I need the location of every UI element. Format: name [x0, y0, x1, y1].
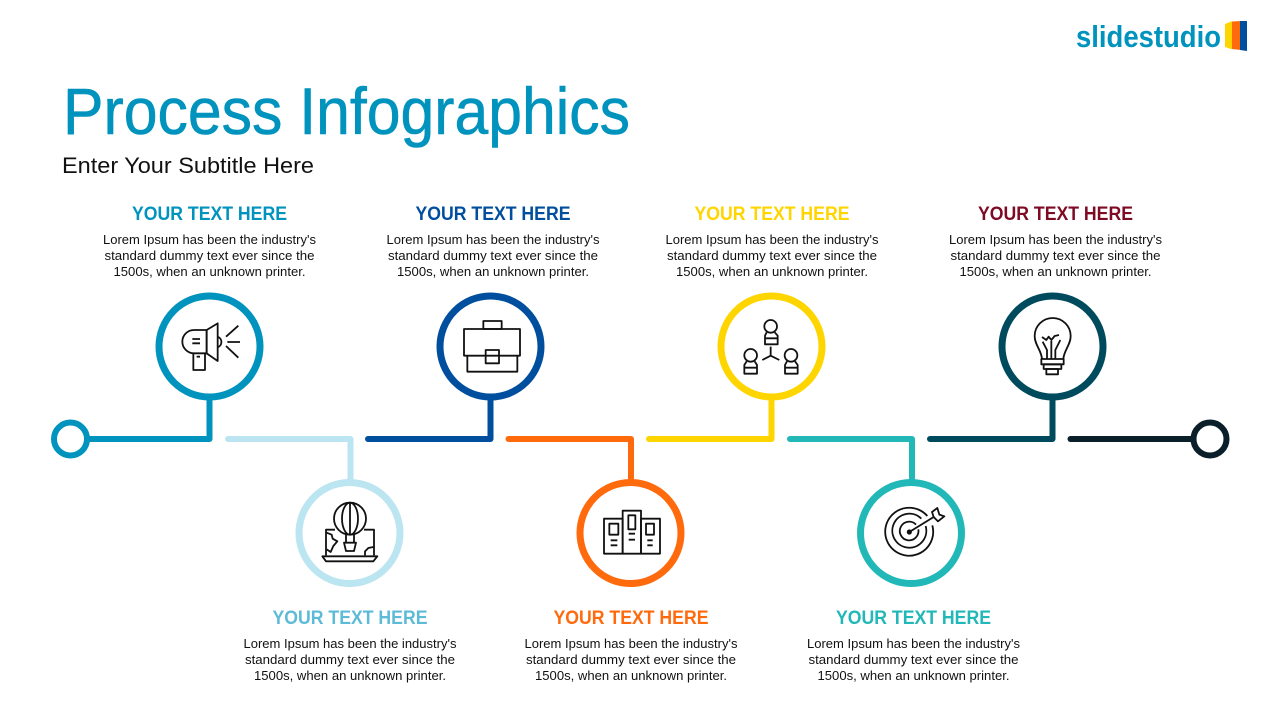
- step 3 text: [386, 233, 600, 279]
- step 7: [949, 204, 1162, 397]
- step 2 ring: [299, 482, 400, 584]
- step 4 heading: YOUR TEXT HERE: [554, 608, 708, 629]
- step 5 ring: [721, 296, 822, 397]
- step 4 text: 1500s, when an unknown printer.: [535, 669, 727, 683]
- step 4 ring: [580, 482, 681, 584]
- step 1 heading: YOUR TEXT HERE: [132, 204, 287, 225]
- step 6 text: standard dummy text ever since the: [808, 653, 1018, 667]
- step 5 text: 1500s, when an unknown printer.: [676, 265, 868, 279]
- icon: balloon and laptop: [322, 503, 377, 561]
- step 6 heading: YOUR TEXT HERE: [836, 608, 991, 629]
- connector: segment 7: [930, 398, 1052, 439]
- connector: segment 1: [88, 398, 210, 439]
- end node: [1194, 422, 1226, 456]
- step 3: [386, 204, 600, 397]
- step 6 text: Lorem Ipsum has been the industry's: [807, 637, 1020, 651]
- step 5: [666, 204, 878, 397]
- connector: segment 3: [368, 398, 490, 439]
- step 5 text: [666, 233, 878, 279]
- step 4 text: [524, 637, 738, 683]
- step 3 text: standard dummy text ever since the: [388, 249, 598, 263]
- connector: segment 2: [228, 439, 350, 482]
- title: Process Infographics: [63, 74, 630, 148]
- step 4 text: Lorem Ipsum has been the industry's: [524, 637, 738, 651]
- step 1 text: [103, 233, 316, 279]
- step 5 text: Lorem Ipsum has been the industry's: [666, 233, 878, 247]
- step 4 text: standard dummy text ever since the: [526, 653, 736, 667]
- step 7 text: [949, 233, 1162, 279]
- icon: light bulb: [1035, 318, 1071, 374]
- icon: binders: [604, 511, 660, 554]
- step 7 text: standard dummy text ever since the: [950, 249, 1160, 263]
- step 7 ring: [1002, 296, 1103, 397]
- step 6 text: 1500s, when an unknown printer.: [818, 669, 1010, 683]
- logo: slidestudio: slidestudio: [1076, 19, 1221, 54]
- step 1: [103, 204, 316, 397]
- step 1 text: Lorem Ipsum has been the industry's: [103, 233, 316, 247]
- step 3 ring: [440, 296, 541, 397]
- icon: megaphone: [182, 323, 240, 370]
- connector: segment 4: [508, 439, 631, 482]
- step 6 ring: [860, 482, 962, 584]
- step 2 heading: YOUR TEXT HERE: [272, 608, 428, 629]
- connector: segment 8: [1070, 436, 1194, 442]
- subtitle: Enter Your Subtitle Here: [62, 153, 314, 178]
- step 2 text: [244, 637, 456, 683]
- connector: segment 6: [790, 439, 912, 482]
- step 7 heading: YOUR TEXT HERE: [978, 204, 1133, 225]
- step 5 text: standard dummy text ever since the: [667, 249, 877, 263]
- step 2 text: standard dummy text ever since the: [245, 653, 455, 667]
- step 1 text: 1500s, when an unknown printer.: [114, 265, 306, 279]
- step 2 text: Lorem Ipsum has been the industry's: [244, 637, 456, 651]
- step 2 text: 1500s, when an unknown printer.: [254, 669, 446, 683]
- start node: [54, 422, 87, 456]
- step 4: [524, 482, 738, 683]
- step 3 text: 1500s, when an unknown printer.: [397, 265, 589, 279]
- icon: target with arrow: [885, 508, 944, 556]
- step 5 heading: YOUR TEXT HERE: [694, 204, 850, 225]
- step 7 text: 1500s, when an unknown printer.: [960, 265, 1152, 279]
- connector: segment 5: [649, 398, 772, 439]
- step 1 text: standard dummy text ever since the: [104, 249, 314, 263]
- step 2: [244, 482, 456, 683]
- step 3 text: Lorem Ipsum has been the industry's: [386, 233, 600, 247]
- step 3 heading: YOUR TEXT HERE: [416, 204, 570, 225]
- step 6 text: [807, 637, 1020, 683]
- step 7 text: Lorem Ipsum has been the industry's: [949, 233, 1162, 247]
- step 6: [807, 482, 1020, 683]
- step 1 ring: [159, 296, 260, 397]
- icon: briefcase: [464, 321, 520, 372]
- icon: team network: [744, 320, 798, 374]
